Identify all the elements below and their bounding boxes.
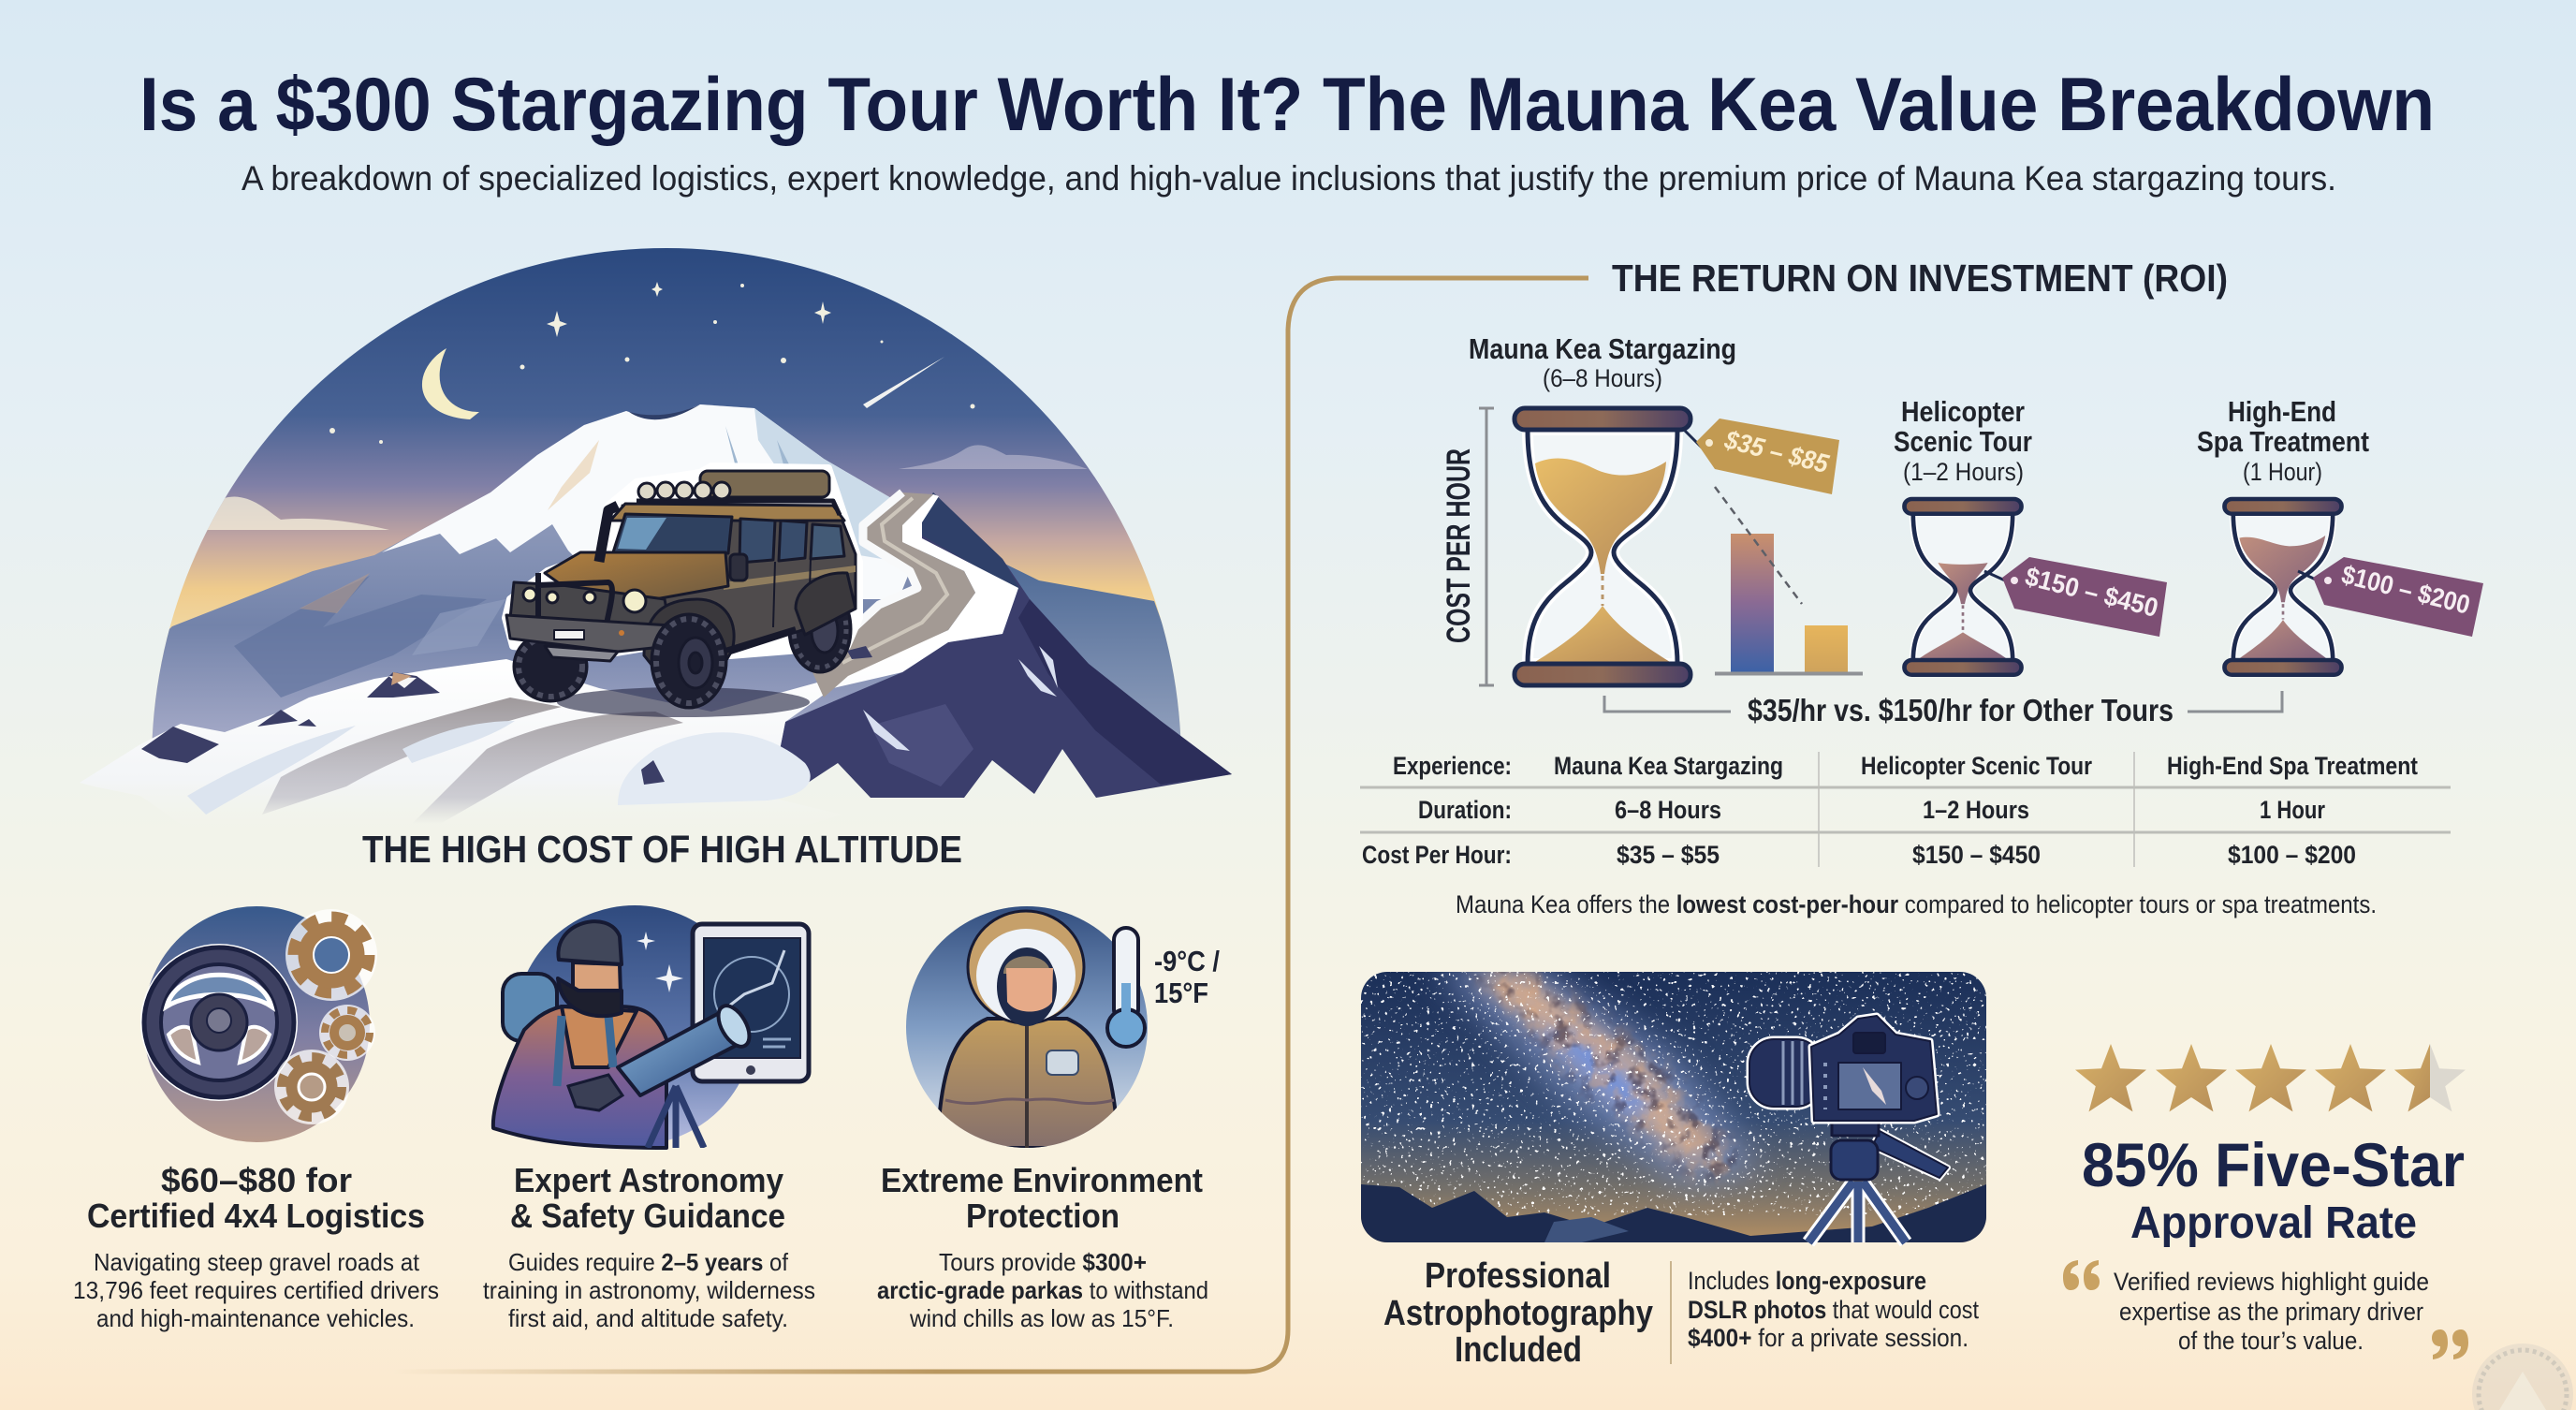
column 1 text: 13,796 feet requires certified drivers (73, 1276, 439, 1304)
stars (329, 282, 975, 444)
y axis: cost per hour (1441, 408, 1494, 685)
icon: medium gear (319, 1005, 375, 1061)
label: professional astrophotography included: Included (1455, 1330, 1582, 1370)
chart label: high-end spa treatment: High-End (2228, 395, 2336, 428)
comparison table (1360, 752, 2451, 869)
heading: return on investment: THE RETURN ON INVESTMENT (ROI) (1612, 257, 2228, 300)
column 1 text: $60–$80 for (161, 1161, 352, 1199)
column 2 text: & Safety Guidance (510, 1197, 785, 1235)
icon: large gear (285, 909, 377, 1001)
bar chart: mauna kea vs others (1715, 487, 1863, 674)
comparison table: $35 – $55 (1617, 841, 1720, 869)
comparison table: 6–8 Hours (1615, 796, 1721, 824)
telescope (568, 1001, 755, 1148)
column 1 text: Certified 4x4 Logistics (87, 1197, 425, 1235)
price tag: $35 - $85: $35 – $85 (1721, 425, 1832, 478)
shooting star (863, 357, 944, 408)
quote marks (2063, 1260, 2468, 1359)
chart label: helicopter scenic tour: (1–2 Hours) (1903, 458, 2024, 486)
astrophotography description: $400+ for a private session. (1688, 1324, 1969, 1352)
verified reviews quote: Verified reviews highlight guide (2114, 1268, 2429, 1296)
hourglass: spa (2224, 499, 2342, 675)
comparison table: 1 Hour (2260, 796, 2325, 824)
column 3 text: arctic-grade parkas to withstand (877, 1276, 1208, 1304)
tablet with star chart (693, 924, 809, 1081)
astrophotography description: DSLR photos that would cost (1688, 1296, 1979, 1324)
watermark seal (2472, 1344, 2573, 1410)
comparison table: Experience: (1393, 752, 1512, 780)
hourglass: helicopter (1904, 499, 2022, 675)
column 1 text: and high-maintenance vehicles. (96, 1304, 415, 1332)
label: professional astrophotography included: Astrophotography (1383, 1294, 1653, 1333)
divider (1670, 1261, 1672, 1364)
icon: astronomy guide with telescope and tablet (493, 905, 809, 1148)
road switchback (805, 492, 975, 698)
temperature label: -9°C / (1154, 945, 1220, 977)
comparison table: 1–2 Hours (1923, 796, 2029, 824)
stat: approval rate: Approval Rate (2130, 1198, 2417, 1248)
label: professional astrophotography included: Professional (1425, 1256, 1611, 1296)
column 1 text: Navigating steep gravel roads at (94, 1248, 420, 1276)
guide figure (493, 921, 666, 1148)
night sky dome (112, 243, 1208, 758)
crescent moon (422, 348, 479, 419)
column 2 text: training in astronomy, wilderness (483, 1276, 815, 1304)
comparison table: $150 – $450 (1912, 841, 2041, 869)
thermometer (1107, 928, 1145, 1047)
icon: arctic parka figure and thermometer (906, 906, 1220, 1148)
comparison table: High-End Spa Treatment (2167, 752, 2418, 780)
chart label: high-end spa treatment: Spa Treatment (2197, 425, 2369, 458)
gold panel border (393, 278, 1588, 1372)
astrophotography description (1688, 1267, 1979, 1352)
comparison table: Duration: (1418, 796, 1512, 824)
column 2 text: Guides require 2–5 years of (508, 1248, 789, 1276)
price tag: $100 - $200: $100 – $200 (2339, 560, 2473, 620)
price tag: $35 - $85 (1685, 419, 1839, 494)
dslr camera on tripod (1749, 1016, 1948, 1242)
verified reviews quote: of the tour’s value. (2178, 1327, 2364, 1355)
icon: lower gear (274, 1050, 349, 1124)
column 2 text: Expert Astronomy (514, 1161, 783, 1199)
comparison table: $100 – $200 (2228, 841, 2356, 869)
column 3 text: Tours provide $300+ (939, 1248, 1147, 1276)
stat: 85% five-star: 85% Five-Star (2082, 1130, 2465, 1199)
label: professional astrophotography included (1383, 1256, 1653, 1370)
road shadow (557, 687, 810, 717)
chart label: helicopter scenic tour: Helicopter (1901, 395, 2025, 428)
comparison table: Cost Per Hour: (1362, 841, 1512, 869)
price tag: $150 - $450: $150 – $450 (2023, 562, 2161, 623)
hourglass: mauna kea (1515, 408, 1690, 685)
y axis: cost per hour: COST PER HOUR (1441, 448, 1477, 643)
comparison bracket: $35/hr vs. $150/hr for Other Tours (1748, 693, 2174, 727)
chart label: high-end spa treatment: (1 Hour) (2243, 458, 2322, 486)
column 3 text: wind chills as low as 15°F. (909, 1304, 1174, 1332)
chart label: high-end spa treatment (2197, 395, 2369, 486)
column 1 text (73, 1161, 439, 1332)
price tag: $150 - $450 (1984, 557, 2167, 637)
column 3 text: Extreme Environment (881, 1161, 1203, 1199)
chart label: helicopter scenic tour (1894, 395, 2032, 486)
parka hood (968, 911, 1084, 1026)
table summary: Mauna Kea offers the lowest cost-per-hour compared to helicopter tours or spa treatments. (1456, 890, 2377, 918)
volcano snow cap (382, 404, 927, 609)
comparison bracket (1604, 691, 2282, 727)
milky way band (1428, 972, 1765, 1199)
astrophotography description: Includes long-exposure (1688, 1267, 1926, 1295)
illustration: 4x4 vehicle on Mauna Kea road under night sky (80, 243, 1232, 829)
chart label: mauna kea stargazing: Mauna Kea Stargazing (1469, 332, 1736, 365)
column 2 text: first aid, and altitude safety. (508, 1304, 788, 1332)
rating stars (2075, 1044, 2466, 1111)
comparison table: Helicopter Scenic Tour (1861, 752, 2092, 780)
title: Is a $300 Stargazing Tour Worth It? The Mauna Kea Value Breakdown (139, 63, 2435, 147)
column 3 text: Protection (966, 1197, 1120, 1235)
chart label: mauna kea stargazing: (6–8 Hours) (1543, 364, 1662, 392)
column 3 text (877, 1161, 1208, 1332)
price tag: $100 - $200 (2298, 557, 2483, 637)
chart label: mauna kea stargazing (1469, 332, 1736, 392)
verified reviews quote: expertise as the primary driver (2119, 1298, 2423, 1326)
foreground dark rock (770, 492, 1232, 798)
verified reviews quote (2114, 1268, 2429, 1355)
icon: steering wheel and gears (140, 906, 377, 1142)
comparison table: Mauna Kea Stargazing (1554, 752, 1783, 780)
heading: the high cost of high altitude: THE HIGH COST OF HIGH ALTITUDE (362, 828, 962, 871)
subtitle: A breakdown of specialized logistics, expert knowledge, and high-value inclusions that justify the premium price of Mauna Kea stargazing tours. (242, 159, 2336, 198)
foreground snow slope (80, 494, 1018, 829)
chart label: helicopter scenic tour: Scenic Tour (1894, 425, 2032, 458)
4x4 vehicle (505, 466, 859, 708)
column 2 text (483, 1161, 815, 1332)
photo: milky way with dslr camera (1361, 964, 1986, 1245)
temperature label fahrenheit: 15°F (1154, 977, 1208, 1009)
